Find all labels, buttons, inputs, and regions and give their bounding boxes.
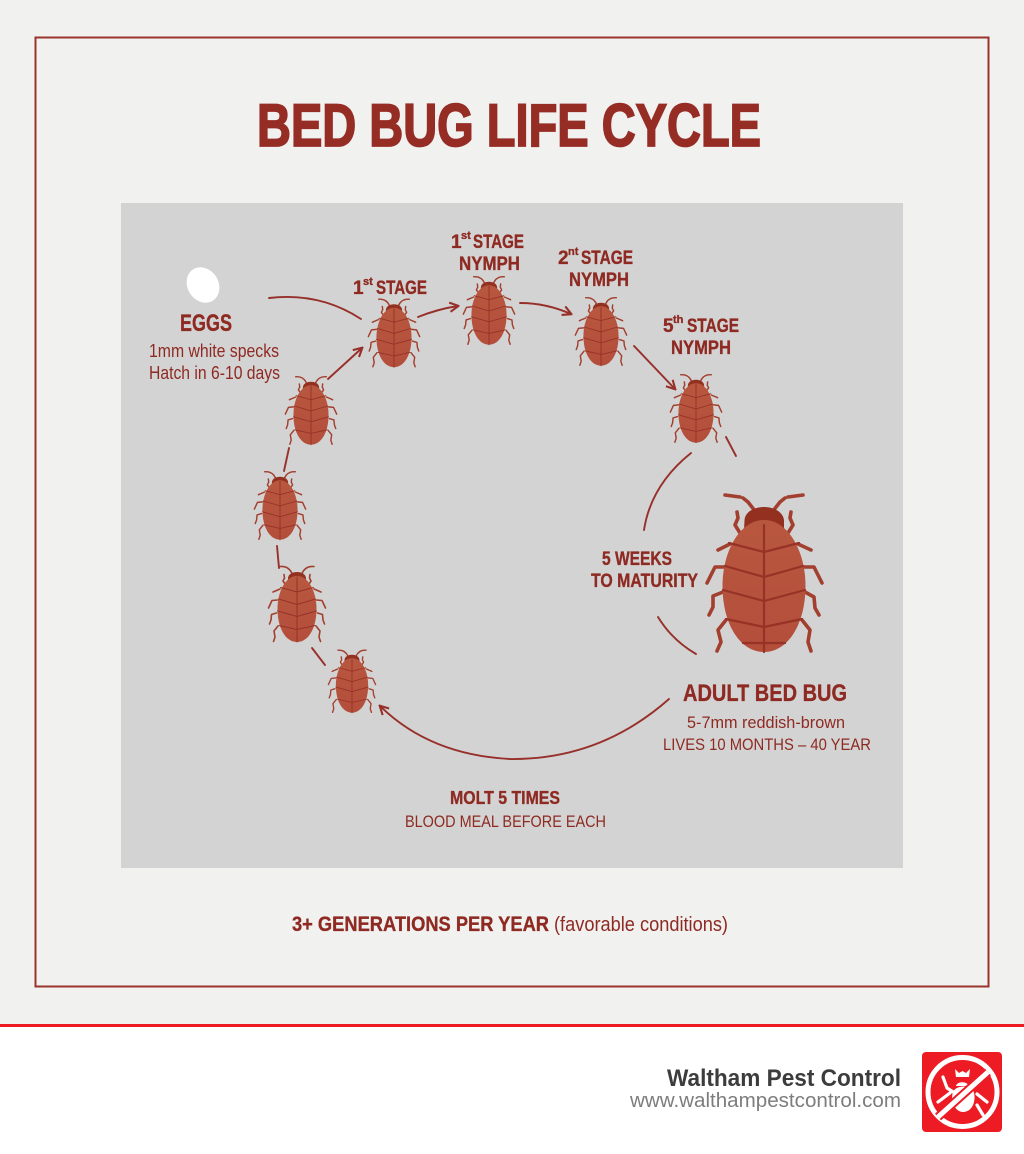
arrow: adult back to nymphs [380, 699, 669, 759]
label: 1st stage: 1 [353, 278, 364, 299]
label: adult bed bug: 5-7mm reddish-brown [687, 713, 845, 732]
label: adult bed bug: LIVES 10 MONTHS – 40 YEAR [663, 735, 871, 754]
arrow segment: left to upper left [284, 448, 289, 471]
arrow segment: 5th nymph toward adult [726, 437, 736, 456]
title: BED BUG LIFE CYCLE [257, 92, 761, 159]
label: adult bed bug [663, 680, 871, 754]
bug: adult [707, 495, 822, 652]
label: 2nd stage nymph: STAGE [581, 248, 633, 269]
label: molt 5 times: MOLT 5 TIMES [450, 788, 560, 808]
arrow: 2nd nymph to 5th nymph [634, 346, 675, 389]
label: 1st stage: st [363, 276, 373, 288]
bug: 5th stage nymph [670, 375, 722, 443]
bug: 1st stage nymph [463, 277, 515, 345]
panel: life cycle diagram [121, 203, 903, 868]
label: 5 weeks to maturity [591, 549, 698, 592]
arrow segment: curve to maturity label [644, 453, 691, 530]
label: 1st stage nymph: NYMPH [459, 254, 520, 275]
label: 1st stage [353, 276, 427, 299]
label: molt 5 times [405, 788, 606, 831]
label: 1st stage nymph: st [461, 230, 471, 242]
caption: generations per year: 3+ GENERATIONS PER YEAR [292, 913, 549, 936]
eggs label [149, 310, 280, 383]
caption: generations per year: (favorable conditions) [554, 914, 728, 936]
arrow: 1st stage to 1st nymph [418, 306, 458, 317]
label: 5th stage nymph: th [673, 314, 684, 326]
bug: nymph left [254, 472, 306, 540]
footer website: www.walthampestcontrol.com [629, 1090, 901, 1112]
eggs label: EGGS [180, 310, 232, 337]
arrow segment: lower left to left [277, 546, 279, 568]
icon: logo [922, 1052, 1002, 1132]
label: 2nd stage nymph: nt [568, 246, 579, 258]
label: 1st stage nymph: STAGE [473, 232, 524, 253]
arrow segment: bottom nymph to lower left [312, 648, 325, 665]
label: 1st stage nymph [451, 230, 524, 275]
label: molt 5 times: BLOOD MEAL BEFORE EACH [405, 812, 606, 831]
footer bar [0, 1024, 1024, 1154]
label: 1st stage nymph: 1 [451, 232, 462, 253]
bug: 2nd stage nymph [575, 298, 627, 366]
footer company name: Waltham Pest Control [667, 1065, 901, 1092]
label: 5th stage nymph: NYMPH [671, 338, 731, 359]
label: 5th stage nymph: 5 [663, 316, 674, 337]
bug: nymph upper left [285, 377, 337, 445]
label: 1st stage: STAGE [376, 278, 427, 299]
arrow: upper left to 1st stage [328, 348, 362, 379]
arrow: eggs to 1st stage [269, 297, 361, 319]
bug: nymph bottom left [328, 650, 376, 713]
label: 5th stage nymph [663, 314, 739, 359]
label: 2nd stage nymph: NYMPH [569, 270, 629, 291]
icon: egg [180, 261, 226, 309]
bug: 1st stage [368, 299, 420, 367]
label: adult bed bug: ADULT BED BUG [683, 680, 847, 707]
label: 2nd stage nymph: 2 [558, 248, 569, 269]
bug: nymph lower left [268, 566, 326, 642]
label: 5 weeks to maturity: 5 WEEKS [602, 549, 672, 570]
eggs label: Hatch in 6-10 days [149, 363, 280, 383]
outer frame [36, 38, 988, 986]
label: 5th stage nymph: STAGE [687, 316, 739, 337]
eggs label: 1mm white specks [149, 341, 279, 361]
label: 2nd stage nymph [558, 246, 633, 291]
arrow segment: maturity label to adult [658, 617, 696, 654]
caption: generations per year [292, 913, 728, 936]
label: 5 weeks to maturity: TO MATURITY [591, 571, 698, 592]
arrow: 1st nymph to 2nd nymph [520, 303, 571, 314]
